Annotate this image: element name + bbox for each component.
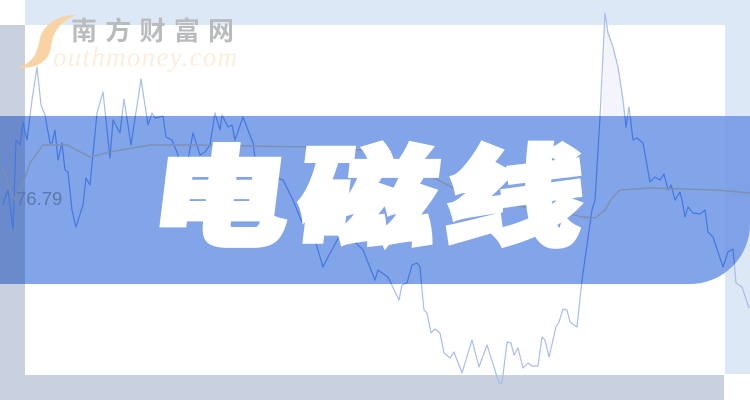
title: 电磁线: [145, 138, 601, 259]
watermark domain: outhmoney.com: [53, 42, 237, 72]
faint area under the price peak: [602, 20, 625, 116]
price line inside the band: [2, 116, 735, 284]
icon: orange swoosh: [17, 15, 76, 68]
darker left edge of the band: [0, 116, 25, 284]
moving average line: [3, 145, 750, 218]
watermark chinese name: 南方财富网: [71, 16, 234, 46]
watermark logo: [17, 15, 237, 72]
translucent blue band: [0, 116, 750, 284]
axis value label: 76.79: [16, 188, 62, 209]
